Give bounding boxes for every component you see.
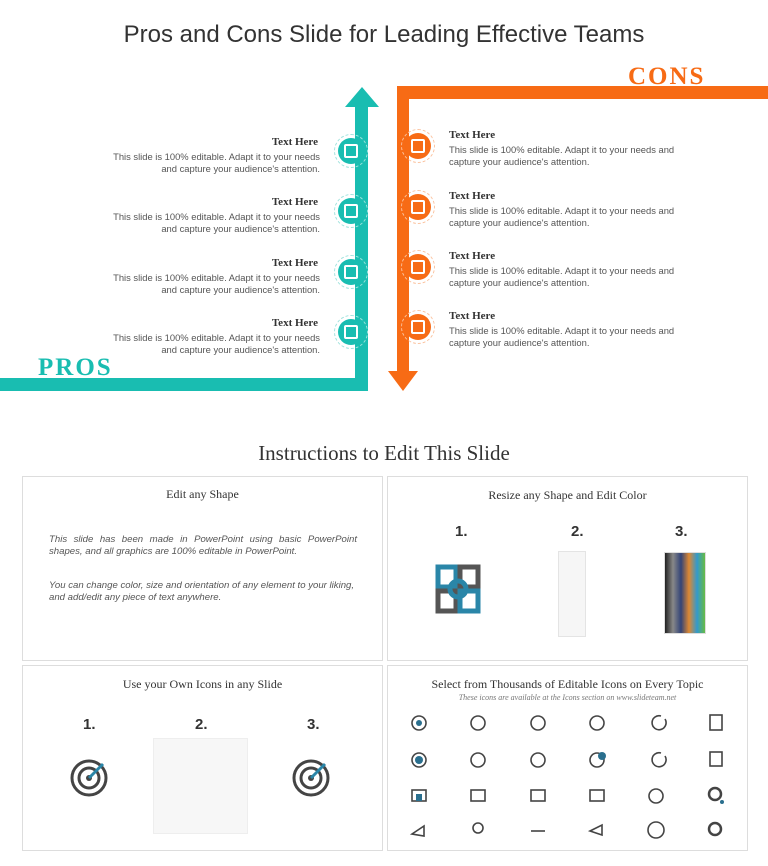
pros item 2 — [113, 194, 368, 234]
pros item 4: Text Here — [272, 317, 318, 329]
pros item 4: This slide is 100% editable. Adapt it to your needs and capture your audience's attention. — [113, 332, 320, 355]
cons item 4: Text Here — [449, 310, 495, 322]
pros item 1: Text Here — [272, 136, 318, 148]
cons item 3: This slide is 100% editable. Adapt it to your needs and capture your audience's attention. — [449, 265, 674, 288]
panel: resize shape: Resize any Shape and Edit Color — [488, 488, 647, 502]
panel: edit any shape: You can change color, size and orientation of any element to your liking, and add/edit any piece of text anywhere. — [49, 580, 354, 603]
pros item 4 — [113, 315, 368, 355]
cons items — [401, 129, 674, 348]
pros arrow — [0, 87, 379, 391]
panel: resize shape: 1. — [455, 523, 468, 540]
cons item 4: This slide is 100% editable. Adapt it to your needs and capture your audience's attention. — [449, 325, 674, 348]
panel: icon library: These icons are available at the Icons section on www.slideteam.net — [459, 693, 676, 702]
panel: resize shape: 3. — [675, 523, 688, 540]
cons arrow — [388, 86, 768, 391]
cons item 3 — [401, 250, 674, 288]
pros item 1: This slide is 100% editable. Adapt it to your needs and capture your audience's attention. — [113, 151, 320, 174]
cons item 1: Text Here — [449, 129, 495, 141]
cons item 4 — [401, 310, 674, 348]
cons item 1 — [401, 129, 674, 167]
panel: icon library — [387, 665, 748, 851]
title: Pros and Cons Slide for Leading Effective Teams — [124, 21, 644, 48]
panel: edit any shape — [22, 476, 383, 661]
panel: resize shape — [387, 476, 748, 661]
cons item 3: Text Here — [449, 250, 495, 262]
pros label: PROS — [38, 354, 113, 381]
instructions heading: Instructions to Edit This Slide — [258, 441, 510, 465]
icon grid — [410, 714, 724, 839]
pros item 3: This slide is 100% editable. Adapt it to your needs and capture your audience's attention. — [113, 272, 320, 295]
pros items — [113, 134, 368, 355]
panel: icon library: Select from Thousands of Editable Icons on Every Topic — [432, 677, 704, 691]
cons item 1: This slide is 100% editable. Adapt it to your needs and capture your audience's attention. — [449, 144, 674, 167]
pros item 2: Text Here — [272, 196, 318, 208]
panel: own icons: 3. — [307, 716, 320, 733]
cons item 2 — [401, 190, 674, 228]
pros item 2: This slide is 100% editable. Adapt it to your needs and capture your audience's attention. — [113, 211, 320, 234]
pros item 3 — [113, 255, 368, 295]
cons item 2: Text Here — [449, 190, 495, 202]
pros item 3: Text Here — [272, 257, 318, 269]
panel: edit any shape: This slide has been made in PowerPoint using basic PowerPoint shapes, and all graphics are 100% editable in PowerPoint. — [49, 534, 357, 557]
panel: own icons: Use your Own Icons in any Slide — [123, 677, 282, 691]
panel: edit any shape: Edit any Shape — [166, 487, 239, 501]
cons item 2: This slide is 100% editable. Adapt it to your needs and capture your audience's attention. — [449, 205, 674, 228]
panel: own icons: 2. — [195, 716, 208, 733]
panel: own icons — [22, 665, 383, 851]
panel: own icons: 1. — [83, 716, 96, 733]
pros item 1 — [113, 134, 368, 174]
cons label: CONS — [628, 63, 705, 90]
panel: resize shape: 2. — [571, 523, 584, 540]
